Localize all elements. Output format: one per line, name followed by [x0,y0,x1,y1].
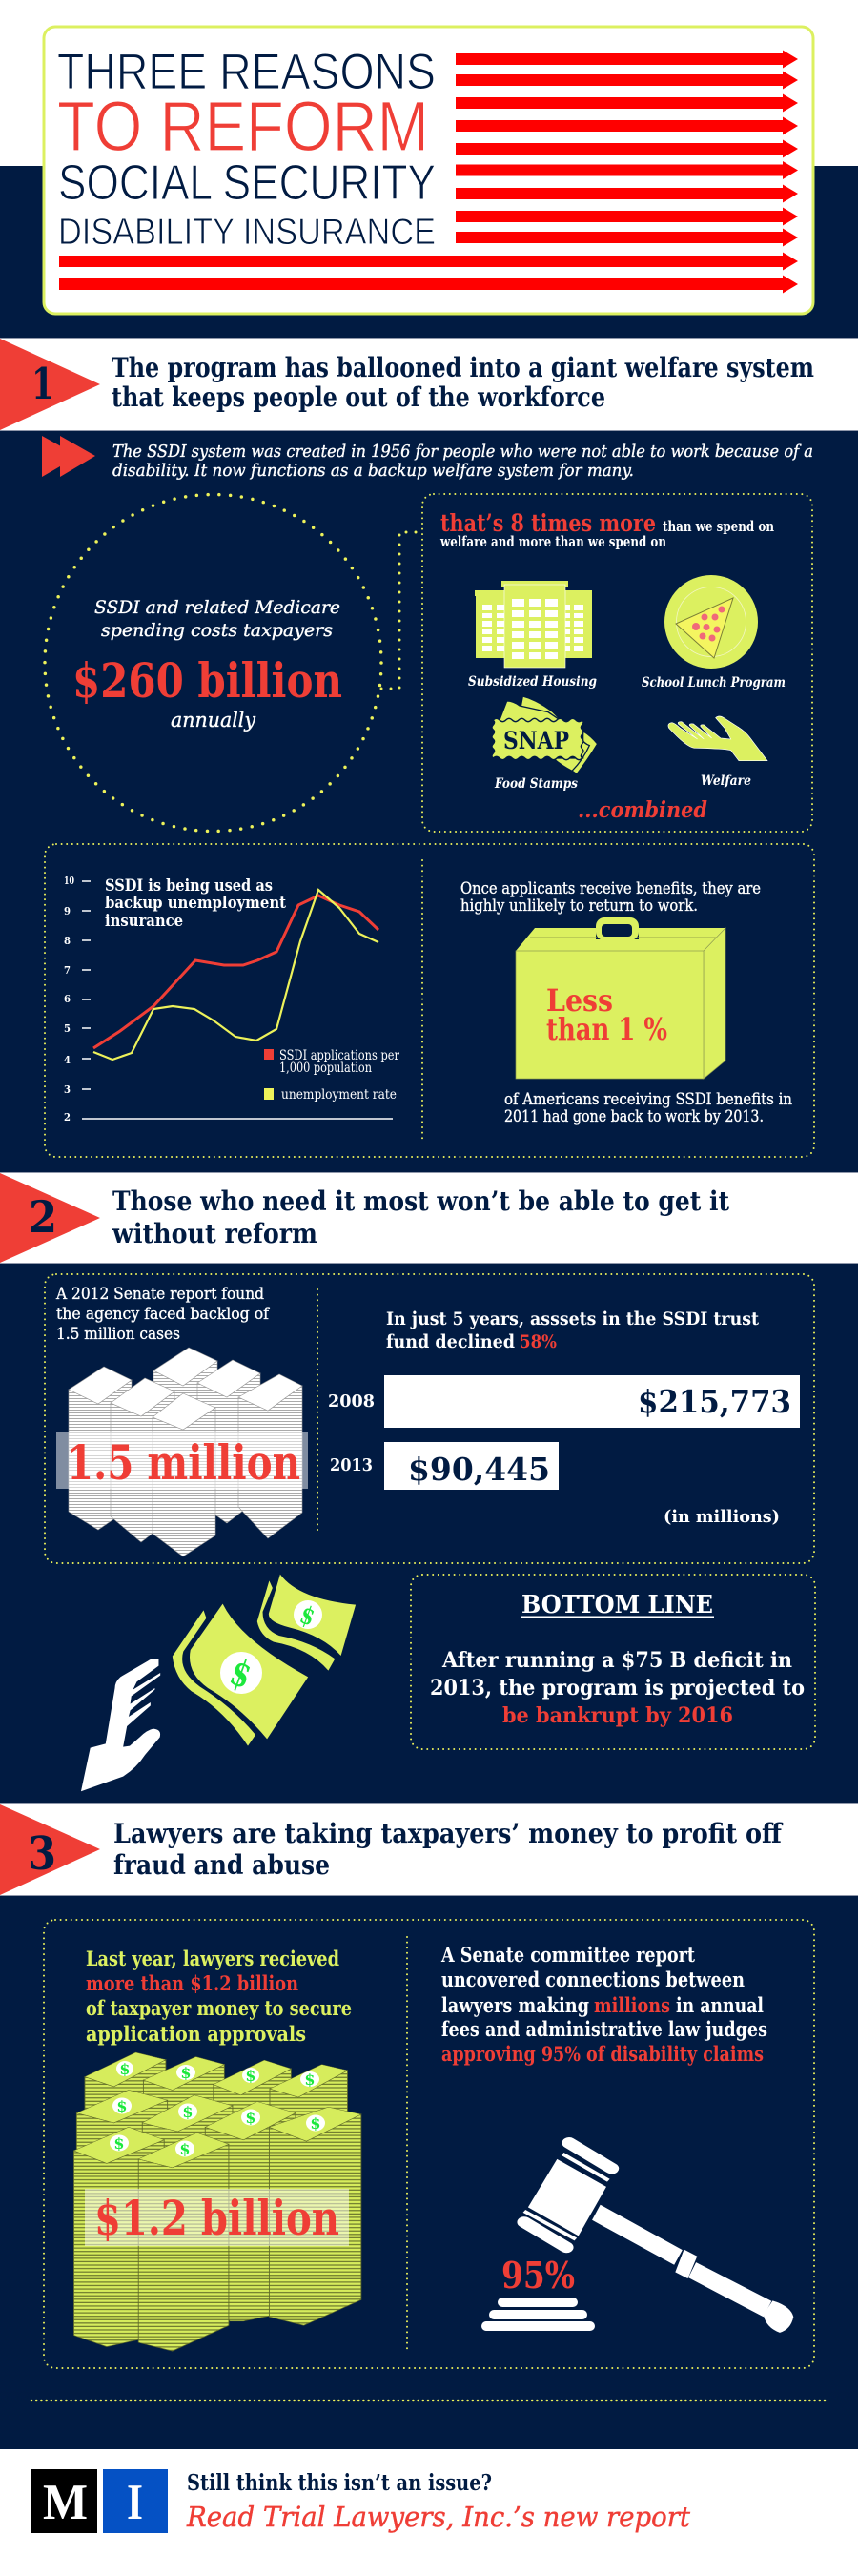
bill seals: $ [180,2064,192,2082]
line: unemployment rate [93,890,378,1060]
chart title: backup unemployment [105,894,286,913]
icon: gavel: 95% [501,2254,575,2297]
return to work text: Once applicants receive benefits, they are [460,879,761,898]
logo: I [127,2475,143,2530]
icon: open hand [668,716,767,761]
section 2 banner: 2 [29,1191,57,1243]
footer: Read Trial Lawyers, Inc.’s new report [186,2501,690,2533]
dotted circle: $260 billion: annually [171,709,256,732]
section 2 banner: Those who need it most won’t be able to get it [112,1185,729,1217]
bar chart: trust fund assets: $90,445 [408,1451,550,1488]
chart axis: 3 [64,1083,71,1096]
title text: TO REFORM [57,87,429,166]
section 1 banner: that keeps people out of the workforce [112,381,605,413]
icon: bills [173,1575,356,1746]
bar chart: trust fund assets: (in millions) [664,1507,780,1527]
backlog text: 1.5 million cases [56,1325,180,1343]
label: food stamps: Food Stamps [494,776,578,792]
trust fund text: In just 5 years, asssets in the SSDI trust [386,1309,759,1329]
label: welfare: Welfare [701,773,751,789]
return to work text: highly unlikely to return to work. [460,896,698,916]
lawyers text: more than $1.2 billion [86,1971,298,1995]
icon: suitcase [516,917,725,1079]
senate committee text: uncovered connections between [441,1968,745,1991]
caption under suitcase: of Americans receiving SSDI benefits in [504,1090,792,1109]
icon: SNAP food stamps [492,696,598,774]
bill seals: $ [245,2067,256,2085]
bill seals [110,2060,325,2158]
panel heading [439,509,774,550]
bill seals: $ [113,2134,125,2153]
caption under suitcase: 2011 had gone back to work by 2013. [504,1107,764,1126]
chart axis: 7 [64,964,71,977]
icon: hand [81,1659,160,1791]
title text [57,44,436,253]
panel: backlog and trust fund [45,1274,814,1563]
icon: double arrow [42,436,95,477]
bar chart: trust fund assets [328,1375,800,1527]
bill seals: $ [116,2097,128,2115]
panel: 8 times more [422,494,812,832]
panel: bottom line: After running a $75 B deficit in [441,1648,792,1673]
chart title [105,876,286,931]
chart title: insurance [105,912,183,931]
panel: unemployment chart and return to work [45,844,814,1157]
caption under suitcase [504,1090,792,1126]
panel: lawyers [44,1920,814,2368]
bar chart: trust fund assets: $215,773 [638,1383,791,1420]
dotted circle: $260 billion: SSDI and related Medicare [94,597,340,618]
senate committee text: lawyers making [441,1993,589,2017]
line chart [64,875,399,1123]
panel heading: welfare and more than we spend on [439,533,666,550]
backlog text: A 2012 Senate report found [55,1285,264,1303]
dotted circle: $260 billion: spending costs taxpayers [101,620,333,641]
icon: subsidized housing building [475,581,592,668]
logo: M [43,2475,88,2530]
footer text: Still think this isn’t an issue? [187,2470,492,2496]
bill seals: $ [119,2060,131,2078]
section 2 banner [0,1172,858,1264]
panel: bottom line [411,1575,815,1749]
combined: ...combined [578,797,707,823]
senate committee text: fees and administrative law judges [441,2017,767,2041]
senate committee text: A Senate committee report [440,1943,695,1967]
section 3 banner [0,1803,858,1896]
illustration: money flying from hand: $ [225,1650,257,1697]
senate committee text: in annual [676,1993,764,2017]
panel heading: that’s 8 times more [440,509,656,537]
icon: SNAP food stamps: SNAP [503,727,569,754]
chart axis: 5 [64,1022,71,1035]
illustration: stacks of money: $1.2 billion [94,2190,339,2246]
return to work text [460,879,761,916]
illustration: money flying from hand: $ [296,1600,318,1632]
trust fund text: fund declined [386,1331,515,1352]
panel: bottom line: 2013, the program is projected to [430,1676,805,1700]
panel: bottom line: be bankrupt by 2016 [502,1703,733,1728]
title card [44,27,813,314]
bill seals: $ [182,2103,194,2121]
icon: suitcase: Less [546,982,613,1019]
lawyers text [86,1947,352,2046]
illustration: stacks of money [73,2052,361,2351]
connector dots [381,532,422,689]
section 1 banner [0,338,858,431]
chart axis [64,875,393,1123]
legend: SSDI applications per [279,1048,399,1063]
chart axis: 6 [64,993,71,1005]
icon: plate with pizza [664,575,758,669]
label: subsidized housing: Subsidized Housing [468,674,597,690]
section 2 banner: without reform [112,1218,317,1249]
dotted circle: $260 billion [45,494,381,832]
trust fund text [386,1309,759,1352]
chart axis: 8 [64,935,71,947]
backlog text [55,1285,271,1343]
panel: bottom line: BOTTOM LINE [521,1591,713,1619]
lawyers text: Last year, lawyers recieved [86,1947,339,1970]
flag stripes of arrows [59,50,798,294]
legend: 1,000 population [279,1061,372,1076]
legend: unemployment rate [281,1087,397,1103]
logo [31,2469,168,2533]
bar chart: trust fund assets: 2013 [330,1455,373,1475]
senate committee text: millions [594,1993,670,2017]
dotted circle: $260 billion: $260 billion [72,652,342,709]
backlog text: the agency faced backlog of [56,1305,271,1323]
illustration: money flying from hand [81,1575,356,1791]
section 3 banner: 3 [28,1827,56,1881]
chart axis: 4 [64,1054,71,1066]
panel heading: than we spend on [663,518,774,535]
chart title: SSDI is being used as [105,876,273,896]
chart axis: 10 [64,875,74,887]
section 3 banner: fraud and abuse [113,1849,330,1881]
legend [264,1048,399,1103]
title text: DISABILITY INSURANCE [58,212,436,253]
senate committee text [440,1943,767,2066]
title text: THREE REASONS [57,44,436,100]
trust fund text: 58% [520,1331,557,1352]
line: SSDI applications [93,896,378,1048]
section 3 banner: Lawyers are taking taxpayers’ money to profit off [113,1818,784,1849]
label: school lunch program: School Lunch Program [642,675,786,690]
bar chart: trust fund assets: 2008 [328,1391,375,1412]
bill seals: $ [245,2109,256,2127]
chart axis: 2 [64,1111,71,1123]
intro paragraph with chevrons: disability. It now functions as a backup welfare system for many. [112,461,634,481]
bill seals: $ [310,2114,321,2133]
bill seals: $ [179,2140,191,2158]
lawyers text: of taxpayer money to secure [86,1996,352,2020]
lawyers text: application approvals [86,2022,306,2046]
title text: SOCIAL SECURITY [58,155,436,211]
section 1 banner: 1 [31,359,54,409]
icon: suitcase: than 1 % [546,1011,667,1047]
icon: gavel [481,2143,793,2333]
illustration: paper stacks [56,1348,308,1556]
footer [31,2469,690,2533]
bill seals: $ [304,2071,316,2089]
chart axis: 9 [64,905,71,917]
illustration: paper stacks: 1.5 million [67,1434,300,1491]
senate committee text: approving 95% of disability claims [441,2042,764,2066]
intro paragraph with chevrons [42,436,813,481]
